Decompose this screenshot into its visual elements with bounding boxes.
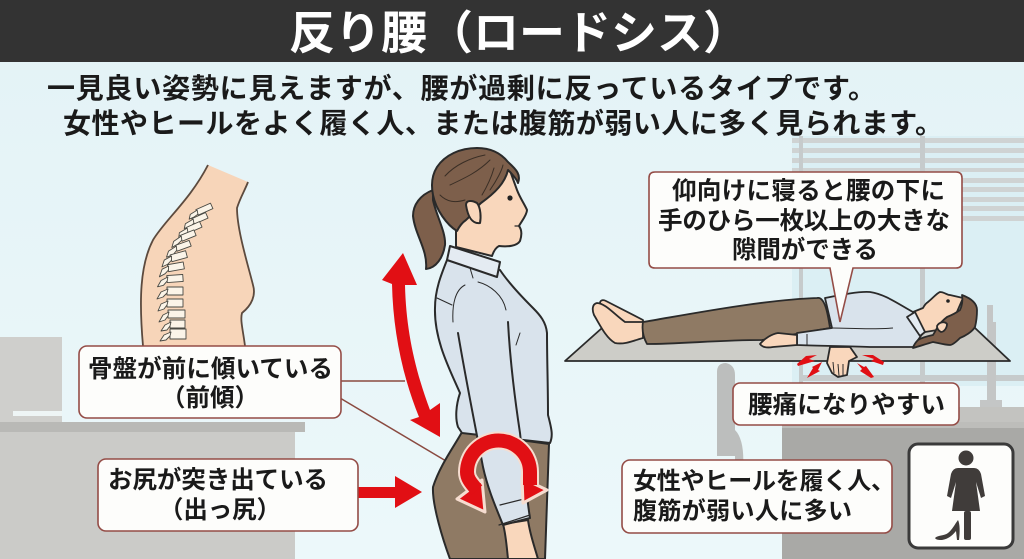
eye bbox=[507, 195, 513, 201]
mat bbox=[565, 328, 1010, 361]
callout: gap under lower back: 仰向けに寝ると腰の下に bbox=[672, 177, 945, 205]
lower hand bbox=[827, 347, 857, 377]
callout: gap under lower back: 手のひら一枚以上の大きな bbox=[658, 207, 950, 235]
lying shirt bbox=[797, 292, 923, 347]
label: common groups bbox=[622, 460, 895, 533]
far foot bbox=[600, 300, 643, 330]
ear bbox=[466, 201, 481, 223]
arrow: red right bbox=[357, 476, 422, 508]
background: right desk and monitor bbox=[782, 305, 1024, 559]
mouth bbox=[515, 225, 519, 227]
callout: gap under lower back bbox=[649, 172, 962, 322]
illustration: lying woman on mat bbox=[565, 292, 1010, 377]
title bar bbox=[0, 0, 1024, 62]
near foot bbox=[593, 303, 643, 343]
icons: pain sparks bbox=[797, 355, 884, 378]
lying head bbox=[913, 292, 963, 332]
sleeve bbox=[458, 322, 530, 525]
label: buttocks protruding bbox=[98, 459, 358, 531]
hair bbox=[432, 148, 519, 231]
intro text: 一見良い姿勢に見えますが、腰が過剰に反っているタイプです。 bbox=[47, 72, 876, 104]
background: chair bbox=[717, 363, 743, 470]
pants bbox=[433, 432, 549, 559]
intro text bbox=[47, 72, 943, 139]
label: buttocks protruding: （出っ尻） bbox=[159, 496, 281, 524]
collar bbox=[447, 246, 500, 277]
ponytail bbox=[413, 190, 445, 269]
label: common groups: 腹筋が弱い人に多い bbox=[633, 497, 852, 525]
lying ear bbox=[937, 322, 947, 332]
upper hand bbox=[760, 333, 797, 347]
label: pelvis tilted bbox=[79, 346, 341, 418]
background: left desk and monitor bbox=[0, 337, 305, 559]
lying pants bbox=[642, 298, 830, 344]
label: common groups: 女性やヒールを履く人、 bbox=[633, 468, 895, 495]
intro text: 女性やヒールをよく履く人、または腹筋が弱い人に多く見られます。 bbox=[63, 107, 943, 139]
shirt torso bbox=[435, 260, 552, 443]
arrow: curved double red bbox=[382, 253, 440, 437]
illustration: spine in torso bbox=[141, 165, 254, 346]
title: 反り腰（ロードシス） bbox=[289, 7, 749, 59]
callout: prone to back pain bbox=[733, 383, 959, 425]
label: pelvis tilted: （前傾） bbox=[161, 384, 259, 412]
vertebrae bbox=[157, 203, 213, 341]
lying collar bbox=[907, 312, 925, 336]
lying hair bbox=[913, 295, 977, 348]
callout: gap under lower back: 隙間ができる bbox=[732, 235, 878, 264]
hand bbox=[503, 520, 538, 559]
background: office window and blinds bbox=[792, 136, 1024, 386]
leader lines bbox=[340, 381, 446, 461]
neck and face bbox=[456, 165, 527, 256]
lying eye bbox=[946, 299, 950, 303]
callout: prone to back pain: 腰痛になりやすい bbox=[748, 391, 945, 419]
arrow: rotating pelvis bbox=[457, 441, 547, 512]
label: pelvis tilted: 骨盤が前に傾いている bbox=[88, 354, 333, 383]
icon: woman and high heel bbox=[909, 444, 1013, 548]
illustration: standing woman bbox=[413, 148, 552, 559]
label: buttocks protruding: お尻が突き出ている bbox=[108, 465, 328, 494]
